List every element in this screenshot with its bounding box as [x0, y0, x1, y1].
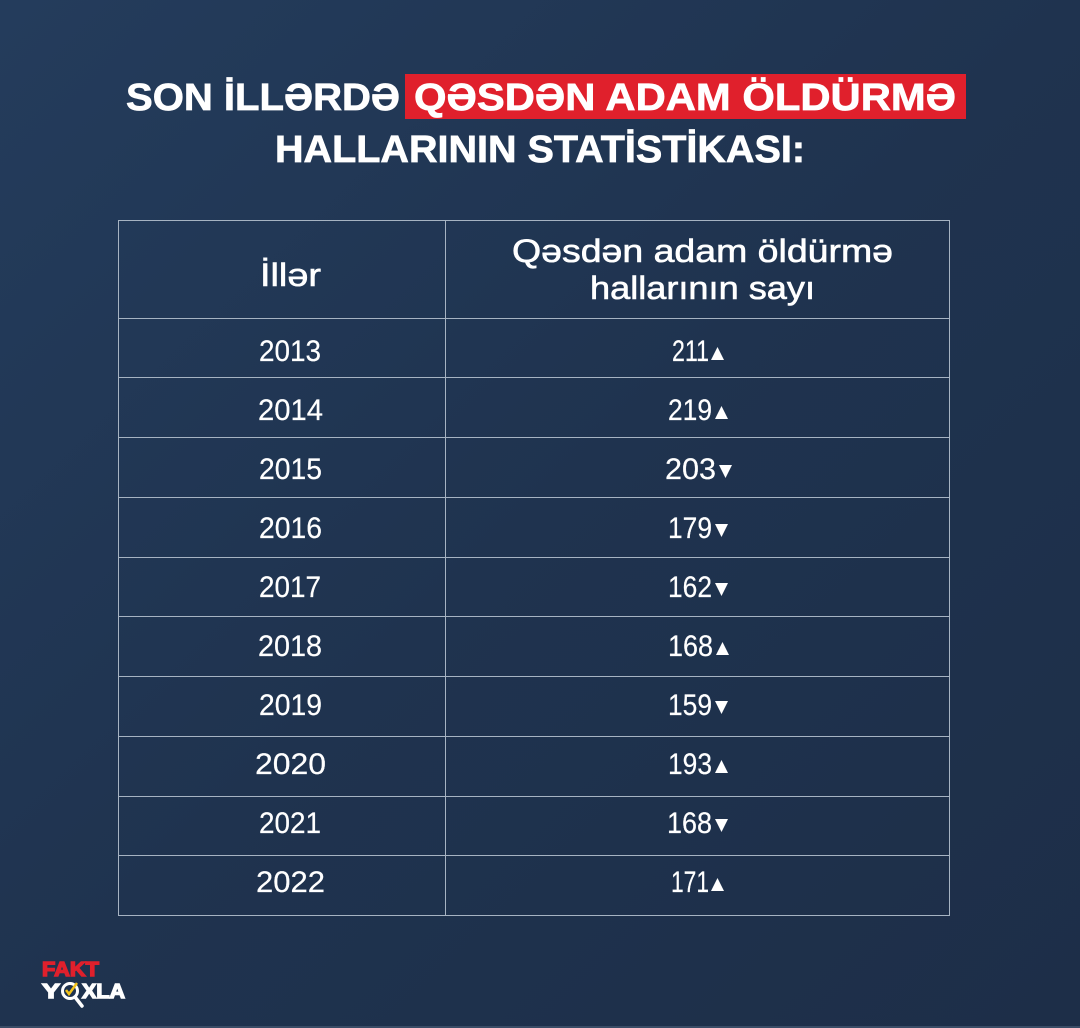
- row 2018: 2018: [258, 630, 322, 663]
- table: [118, 220, 950, 916]
- row 2015: [259, 453, 732, 486]
- row 2021: [259, 807, 728, 840]
- row 2015: 2015: [259, 453, 322, 486]
- row 2014: [258, 394, 728, 427]
- row 2016: 2016: [259, 512, 322, 545]
- row 2014: 2014: [258, 394, 323, 427]
- row 2019: 159: [668, 689, 712, 722]
- row 2013: [259, 335, 724, 368]
- row 2016: [259, 512, 728, 545]
- row 2022: [256, 866, 724, 899]
- row 2020: [255, 748, 728, 781]
- row 2014: 219: [668, 394, 712, 427]
- row 2022: 171: [671, 866, 709, 899]
- row 2015: 203: [665, 453, 716, 486]
- header: count: hallarının sayı: [590, 270, 815, 306]
- row 2020: 193: [668, 748, 712, 781]
- title line 2: HALLARININ STATİSTİKASI:: [275, 129, 805, 171]
- title line 1 highlighted: QƏSDƏN ADAM ÖLDÜRMƏ: [414, 76, 956, 119]
- row 2017: [259, 571, 728, 604]
- row 2019: 2019: [259, 689, 322, 722]
- row 2016: 179: [668, 512, 712, 545]
- row 2019: [259, 689, 728, 722]
- row 2013: 211: [672, 335, 709, 368]
- row 2013: 2013: [259, 335, 321, 368]
- title: [126, 74, 966, 171]
- header: years: İllər: [260, 257, 321, 293]
- row 2017: 162: [668, 571, 712, 604]
- table grid: [118, 220, 950, 916]
- row 2021: 168: [667, 807, 712, 840]
- title highlight box: [405, 74, 966, 119]
- header: count: Qəsdən adam öldürmə: [512, 233, 893, 269]
- row 2020: 2020: [255, 748, 326, 781]
- row 2018: [258, 630, 729, 663]
- row 2017: 2017: [259, 571, 321, 604]
- row 2018: 168: [668, 630, 713, 663]
- logo: Fakt Yoxla: FAKT: [42, 959, 99, 981]
- row 2022: 2022: [256, 866, 325, 899]
- icon: magnifier with check: [62, 983, 82, 1006]
- logo: Fakt Yoxla: Y: [42, 981, 61, 1003]
- logo: Fakt Yoxla: [42, 959, 125, 1006]
- row 2021: 2021: [259, 807, 321, 840]
- title line 1 left: SON İLLƏRDƏ: [126, 77, 400, 119]
- logo: Fakt Yoxla: XLA: [82, 981, 125, 1003]
- header: count: [512, 233, 893, 306]
